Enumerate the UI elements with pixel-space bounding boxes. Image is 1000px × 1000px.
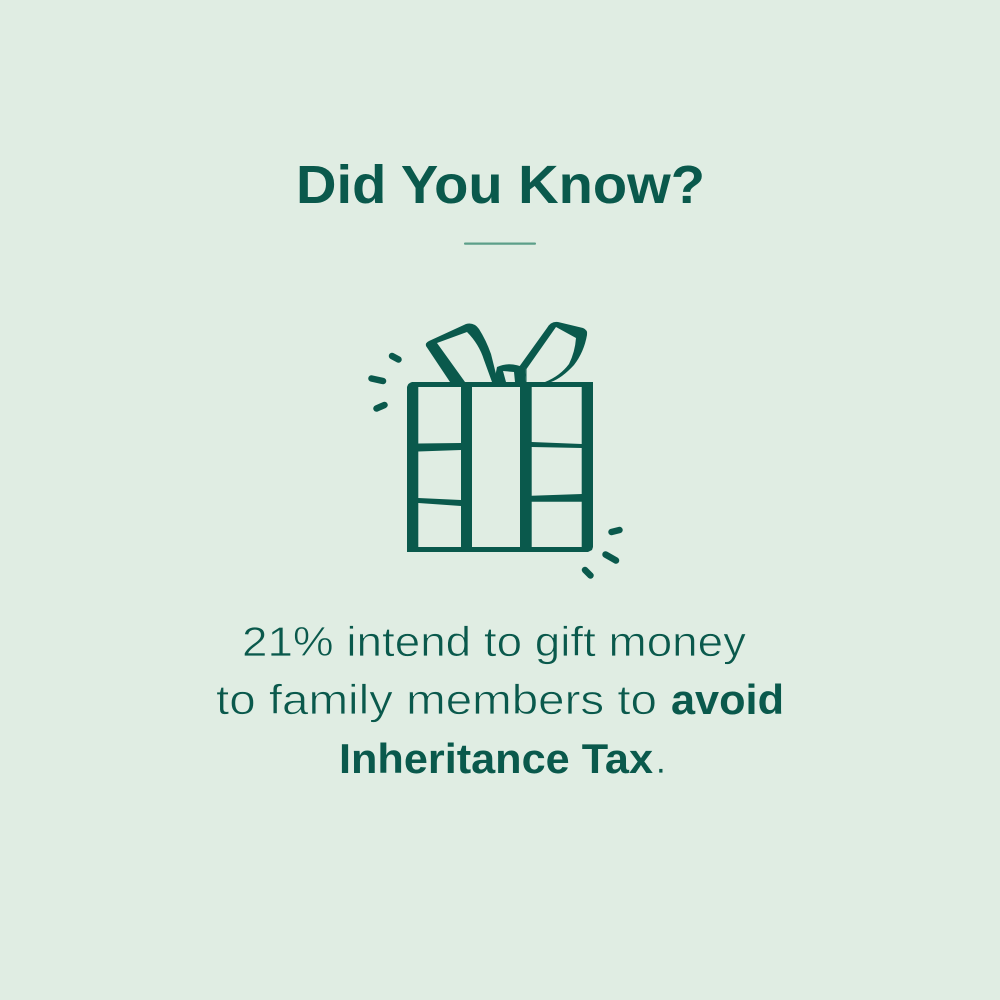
icon: sparkle marks right	[585, 530, 620, 576]
icon: right bow loop	[519, 322, 587, 382]
text block: statement: avoid	[671, 676, 784, 723]
text block: statement	[216, 618, 784, 782]
icon: bow knot	[494, 364, 526, 382]
text block: statement: to family members to	[216, 676, 657, 723]
text block: statement: .	[655, 735, 667, 782]
icon: gift box body	[407, 382, 593, 552]
icon: left bow loop	[426, 324, 498, 382]
divider	[464, 242, 536, 245]
text block: statement: Inheritance Tax	[339, 735, 654, 782]
text block: statement: 21% intend to gift money	[242, 618, 746, 665]
title: Did You Know?	[296, 155, 705, 215]
icon: sparkle marks left	[372, 356, 398, 408]
icon: gift box	[407, 322, 593, 552]
